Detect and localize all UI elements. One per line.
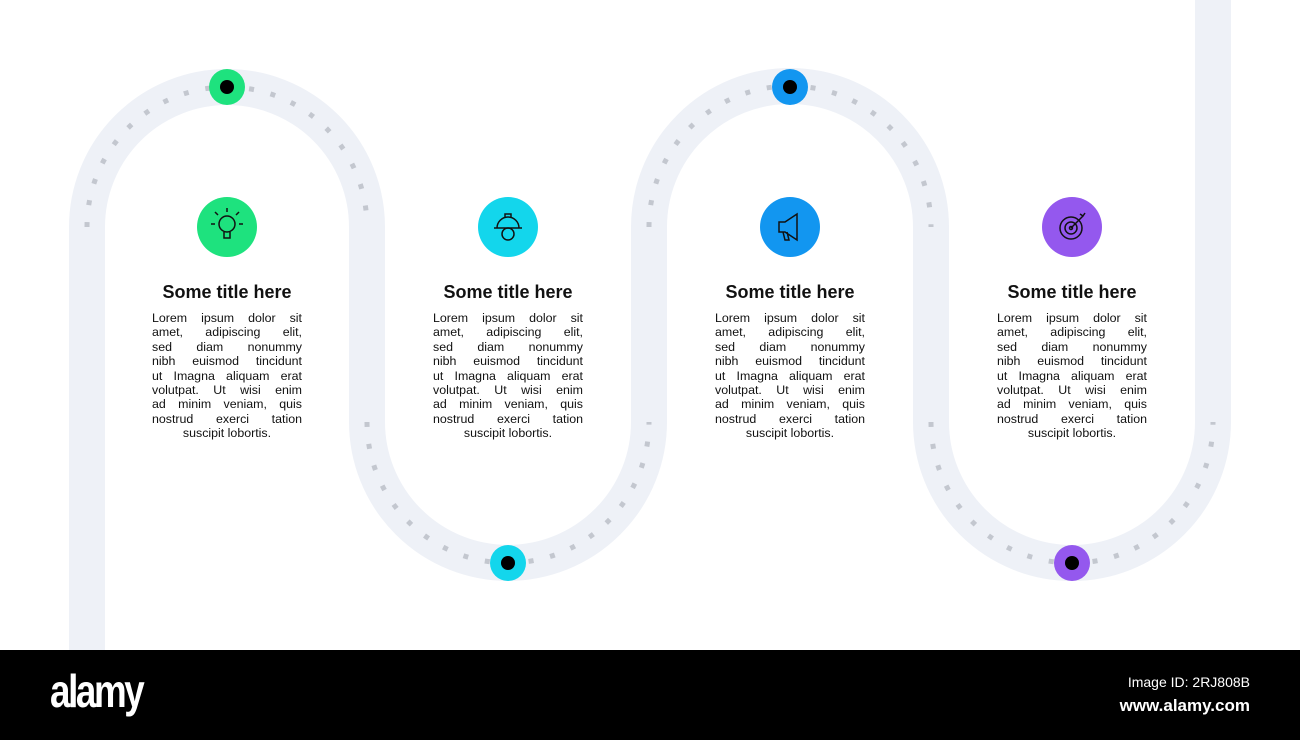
step 2 text: ad minim veniam, quis — [433, 397, 583, 411]
step 3 text: sed diam nonummy — [715, 340, 865, 354]
image id: Image ID: 2RJ808B — [1128, 674, 1250, 690]
step 1 text: ut Imagna aliquam erat — [152, 369, 302, 383]
step 3 text: ut Imagna aliquam erat — [715, 369, 865, 383]
step 2 text: Some title here — [443, 282, 573, 302]
step 1 text: Some title here — [162, 282, 292, 302]
step 3 text: nibh euismod tincidunt — [715, 354, 865, 368]
step 4 text: Some title here — [1007, 282, 1137, 302]
step 2 text: Lorem ipsum dolor sit — [433, 311, 583, 325]
step 4 text: volutpat. Ut wisi enim — [997, 383, 1147, 397]
step 4 text: ad minim veniam, quis — [997, 397, 1147, 411]
step markers — [209, 69, 1090, 581]
step 2 text: ut Imagna aliquam erat — [433, 369, 583, 383]
step 3 text: volutpat. Ut wisi enim — [715, 383, 865, 397]
step 1 text: ad minim veniam, quis — [152, 397, 302, 411]
step 4 text: sed diam nonummy — [997, 340, 1147, 354]
step 4 text: Lorem ipsum dolor sit — [997, 311, 1147, 325]
step 4 text: amet, adipiscing elit, — [997, 325, 1147, 339]
step 2 text: sed diam nonummy — [433, 340, 583, 354]
logo: alamy — [50, 665, 142, 717]
step 1 text: nostrud exerci tation — [152, 412, 302, 426]
step 3 text: amet, adipiscing elit, — [715, 325, 865, 339]
step 1 text: sed diam nonummy — [152, 340, 302, 354]
step 1 text: nibh euismod tincidunt — [152, 354, 302, 368]
step 4 text: suscipit lobortis. — [1028, 426, 1116, 440]
step 2 text: nibh euismod tincidunt — [433, 354, 583, 368]
step 2 text: volutpat. Ut wisi enim — [433, 383, 583, 397]
step 2 text: suscipit lobortis. — [464, 426, 552, 440]
step 4 text: ut Imagna aliquam erat — [997, 369, 1147, 383]
url: www.alamy.com — [1120, 696, 1250, 715]
step 3 text: suscipit lobortis. — [746, 426, 834, 440]
step 1 text: Lorem ipsum dolor sit — [152, 311, 302, 325]
step 3 text: Lorem ipsum dolor sit — [715, 311, 865, 325]
step 3 text: Some title here — [725, 282, 855, 302]
step 3 text — [715, 282, 865, 440]
step 3 text: ad minim veniam, quis — [715, 397, 865, 411]
step 1 text: volutpat. Ut wisi enim — [152, 383, 302, 397]
step 1 text: amet, adipiscing elit, — [152, 325, 302, 339]
step 3 text: nostrud exerci tation — [715, 412, 865, 426]
step 4 text: nibh euismod tincidunt — [997, 354, 1147, 368]
step 4 text — [997, 282, 1147, 440]
step 1 text — [152, 282, 302, 440]
step 4 text: nostrud exerci tation — [997, 412, 1147, 426]
step 1 text: suscipit lobortis. — [183, 426, 271, 440]
step 2 text: amet, adipiscing elit, — [433, 325, 583, 339]
step 2 text — [433, 282, 583, 440]
footer bar — [0, 650, 1300, 740]
icon circles — [197, 197, 1102, 257]
step 2 text: nostrud exerci tation — [433, 412, 583, 426]
